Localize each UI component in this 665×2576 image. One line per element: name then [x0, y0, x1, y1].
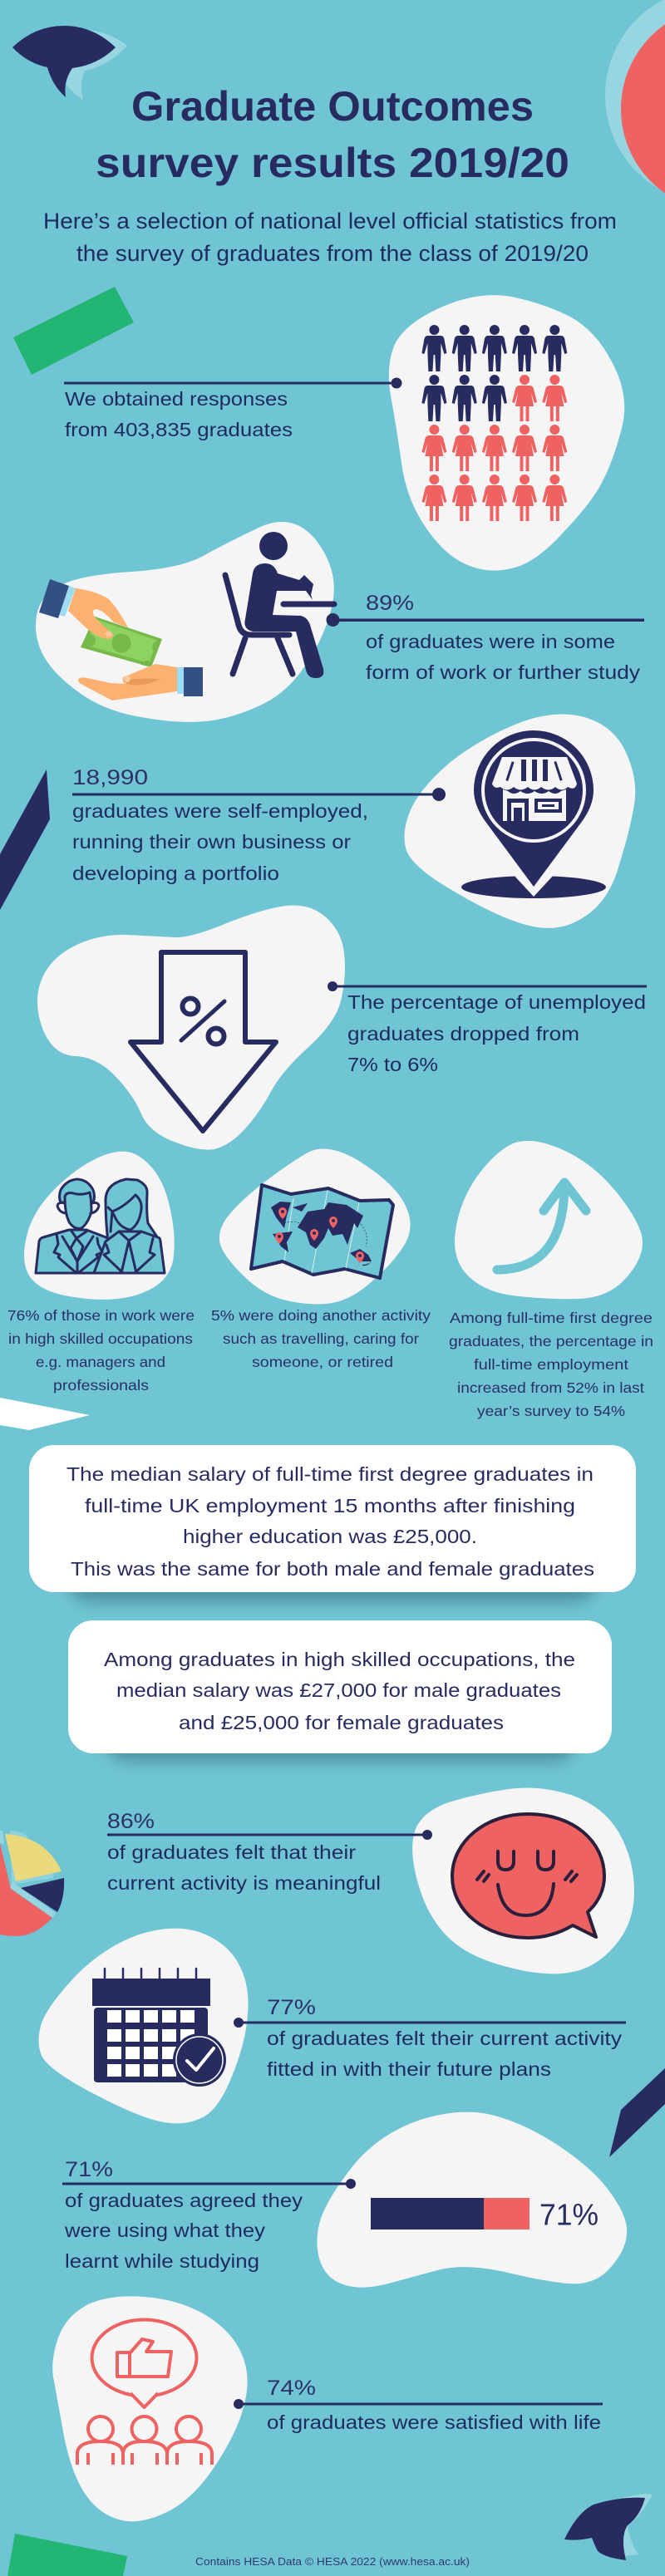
text: 5% [211, 1307, 431, 1370]
text: 5%: someone, or retired [252, 1354, 393, 1370]
blob [406, 717, 633, 926]
card: high skilled salary: Among graduates in high skilled occupations, the [104, 1649, 575, 1670]
text: 74%: of graduates were satisfied with life [267, 2411, 601, 2433]
card: median salary: This was the same for both male and female graduates [71, 1558, 594, 1580]
panel: satisfied with life [55, 2298, 603, 2519]
card: median salary: full-time UK employment 15 months after finishing [85, 1495, 575, 1517]
blob [222, 1152, 408, 1301]
text: 71%: learnt while studying [65, 2250, 259, 2272]
text: responses: We obtained responses [65, 388, 288, 410]
decoration: white shard [0, 1398, 90, 1430]
blob [415, 1791, 632, 1971]
text: unemployed: 7% to 6% [347, 1054, 438, 1075]
connector line [234, 2399, 603, 2409]
blob [55, 2298, 245, 2519]
card: median salary: The median salary of full-time first degree graduates in [66, 1463, 594, 1485]
connector line [62, 2179, 356, 2189]
text: 86%: of graduates felt that their [107, 1841, 356, 1863]
icon: calendar with check [92, 1969, 226, 2087]
text: 77%: fitted in with their future plans [267, 2058, 551, 2080]
icon: business man and woman [36, 1179, 165, 1273]
chart: 71% bar [371, 2197, 598, 2232]
text: 77%: of graduates felt their current activity [267, 2028, 623, 2049]
text: 74%: 74% [267, 2377, 316, 2400]
text: among full-time [449, 1310, 653, 1419]
text: among full-time: increased from 52% in last [457, 1379, 644, 1396]
text: 76%: professionals [53, 1377, 149, 1394]
card: high skilled salary: and £25,000 for female graduates [179, 1712, 504, 1733]
subtitle: the survey of graduates from the class of 2019/20 [76, 241, 589, 266]
card: median salary: higher education was £25,000. [183, 1526, 477, 1547]
text: among full-time: full-time employment [474, 1356, 628, 1373]
text: 18,990 [72, 766, 368, 884]
text: 18,990: graduates were self-employed, [72, 800, 368, 822]
card: high skilled salary [68, 1620, 612, 1762]
text: 71%: 71% [65, 2158, 113, 2181]
text: 89%: form of work or further study [366, 661, 641, 683]
panel: responses [64, 297, 622, 568]
decoration: navy sliver right [609, 2068, 665, 2157]
panel: another activity [211, 1152, 431, 1370]
text: unemployed: The percentage of unemployed [347, 991, 646, 1013]
connector line [326, 613, 644, 627]
chart: 71% bar: 71% [539, 2197, 598, 2232]
text: 5%: such as travelling, caring for [223, 1330, 419, 1347]
text: 86%: current activity is meaningful [107, 1872, 381, 1894]
decoration: pie chart [0, 1831, 64, 1936]
footer: source: Contains HESA Data © HESA 2022 (www.hesa.ac.uk) [195, 2555, 470, 2568]
decoration: bottom-right speech bubble [564, 2494, 653, 2560]
icon: rising arrow [497, 1182, 586, 1270]
text: 71% [64, 2158, 303, 2272]
title: Graduate Outcomes [131, 83, 534, 130]
blob [319, 2115, 624, 2285]
card: high skilled salary: median salary was £27,000 for male graduates [116, 1679, 561, 1701]
blob [457, 1143, 640, 1296]
text: 86%: 86% [107, 1810, 155, 1833]
connector line [72, 788, 446, 801]
icon: grid of male and female figures [421, 325, 567, 521]
icon: smiling speech bubble [452, 1814, 604, 1938]
text: 71%: of graduates agreed they [65, 2190, 303, 2211]
panel: unemployment [40, 908, 647, 1148]
text: 89% [366, 592, 641, 683]
blob: people [392, 297, 622, 568]
icon: thumbs up over three people [77, 2320, 212, 2465]
card: median salary [29, 1445, 636, 1602]
text: 5%: 5% were doing another activity [211, 1307, 431, 1324]
text: 76%: 76% of those in work were [7, 1307, 195, 1324]
text: 89%: of graduates were in some [366, 631, 615, 652]
text: 77% [267, 1996, 623, 2080]
text: 76%: e.g. managers and [36, 1354, 165, 1370]
text: among full-time: graduates, the percentage in [449, 1333, 653, 1349]
decoration: navy sliver left [0, 769, 50, 910]
text: 18,990: developing a portfolio [72, 863, 279, 884]
panel: future plans [42, 1931, 626, 2121]
icon: hands exchanging money [39, 579, 203, 701]
panel: in work or study [38, 524, 644, 720]
subtitle: Here’s a selection of national level official statistics from [43, 209, 617, 234]
decoration: top-right circle [605, 0, 665, 212]
blob [27, 1154, 172, 1297]
text: 77%: 77% [267, 1996, 316, 2019]
text: unemployed [347, 991, 646, 1075]
decoration: green bar [13, 287, 134, 375]
text: among full-time: year’s survey to 54% [477, 1403, 625, 1419]
panel: using what they learnt [62, 2115, 624, 2285]
text: 76% [7, 1307, 195, 1394]
title: survey results 2019/20 [96, 140, 569, 186]
text: 18,990: 18,990 [72, 766, 148, 789]
text: 18,990: running their own business or [72, 831, 351, 853]
text: 74% [267, 2377, 601, 2433]
blob [42, 1931, 246, 2121]
text: among full-time: Among full-time first degree [450, 1310, 653, 1326]
blob [40, 908, 342, 1148]
blob [38, 524, 332, 720]
text: 89%: 89% [366, 592, 414, 615]
text: unemployed: graduates dropped from [347, 1023, 579, 1045]
panel: full-time employment [449, 1143, 653, 1419]
icon: percent down arrow [131, 952, 276, 1131]
text: responses [65, 388, 293, 440]
icon: shop location pin [461, 730, 606, 898]
connector line [107, 1830, 432, 1840]
connector line [328, 981, 647, 991]
text: 76%: in high skilled occupations [8, 1330, 193, 1347]
icon: world map with pins [251, 1185, 393, 1278]
connector line [64, 377, 402, 389]
decoration: top-left speech bubble [12, 26, 127, 100]
decoration: green bar bottom [7, 2534, 127, 2576]
panel: meaningful [107, 1791, 632, 1971]
connector line [234, 2018, 626, 2028]
text: 71%: were using what they [64, 2220, 266, 2241]
text: 86% [107, 1810, 381, 1894]
panel: self-employed [72, 717, 633, 926]
title [96, 83, 569, 186]
subtitle [43, 209, 617, 266]
panel: high skilled occupations [7, 1154, 195, 1394]
icon: student at desk [225, 532, 334, 678]
text: responses: from 403,835 graduates [65, 419, 293, 440]
